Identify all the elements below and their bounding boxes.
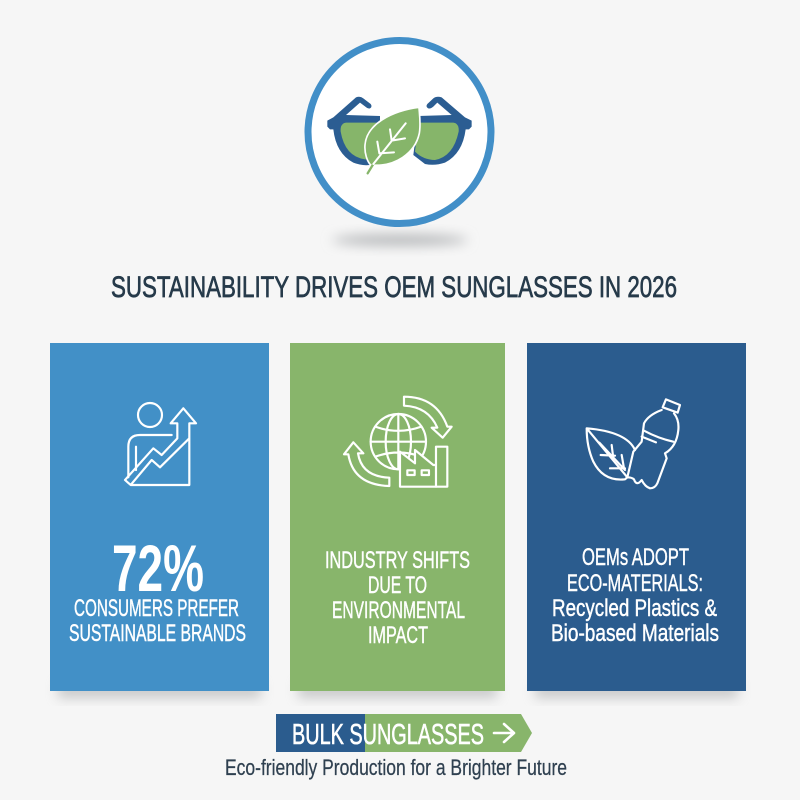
icon: person with rising arrow chart	[125, 403, 196, 485]
text: industry shifts due to environmental impact: ENVIRONMENTAL	[332, 597, 465, 624]
icon: leaf and plastic bottle	[587, 399, 680, 488]
banner: bulk sunglasses	[276, 714, 532, 752]
text: industry shifts due to environmental impact: DUE TO	[368, 572, 427, 599]
text: OEMs adopt eco-materials: Bio-based Materials	[551, 620, 719, 647]
icon: sunglasses and leaf	[327, 97, 472, 173]
text: industry shifts due to environmental impact: INDUSTRY SHIFTS	[325, 547, 470, 574]
text: industry shifts due to environmental impact: IMPACT	[368, 622, 428, 649]
icon: globe, factory and recycling arrows	[344, 397, 452, 487]
stat: 72%: 72%	[112, 531, 204, 605]
logo shadow	[332, 234, 468, 246]
logo circle	[308, 40, 491, 224]
text: consumers prefer sustainable brands: SUSTAINABLE BRANDS	[69, 620, 246, 647]
text: consumers prefer sustainable brands: CONSUMERS PREFER	[74, 595, 239, 622]
icon: arrow	[494, 724, 514, 742]
panel: consumers prefer sustainable brands	[50, 343, 269, 698]
panel: industry shifts	[290, 343, 505, 698]
text: OEMs adopt eco-materials	[551, 544, 719, 647]
text: OEMs adopt eco-materials: OEMs ADOPT	[582, 544, 689, 571]
text: industry shifts due to environmental impact	[325, 547, 470, 649]
logo: sunglasses with leaf in circle	[308, 40, 491, 246]
text: OEMs adopt eco-materials: ECO-MATERIALS:	[567, 570, 703, 597]
text: OEMs adopt eco-materials: Recycled Plastics &	[552, 595, 717, 622]
tagline: Eco-friendly Production for a Brighter Future	[225, 755, 567, 780]
text: consumers prefer sustainable brands	[69, 595, 246, 647]
panel: OEMs adopt eco-materials	[527, 343, 746, 698]
banner: bulk sunglasses: BULK SUNGLASSES	[292, 719, 484, 751]
